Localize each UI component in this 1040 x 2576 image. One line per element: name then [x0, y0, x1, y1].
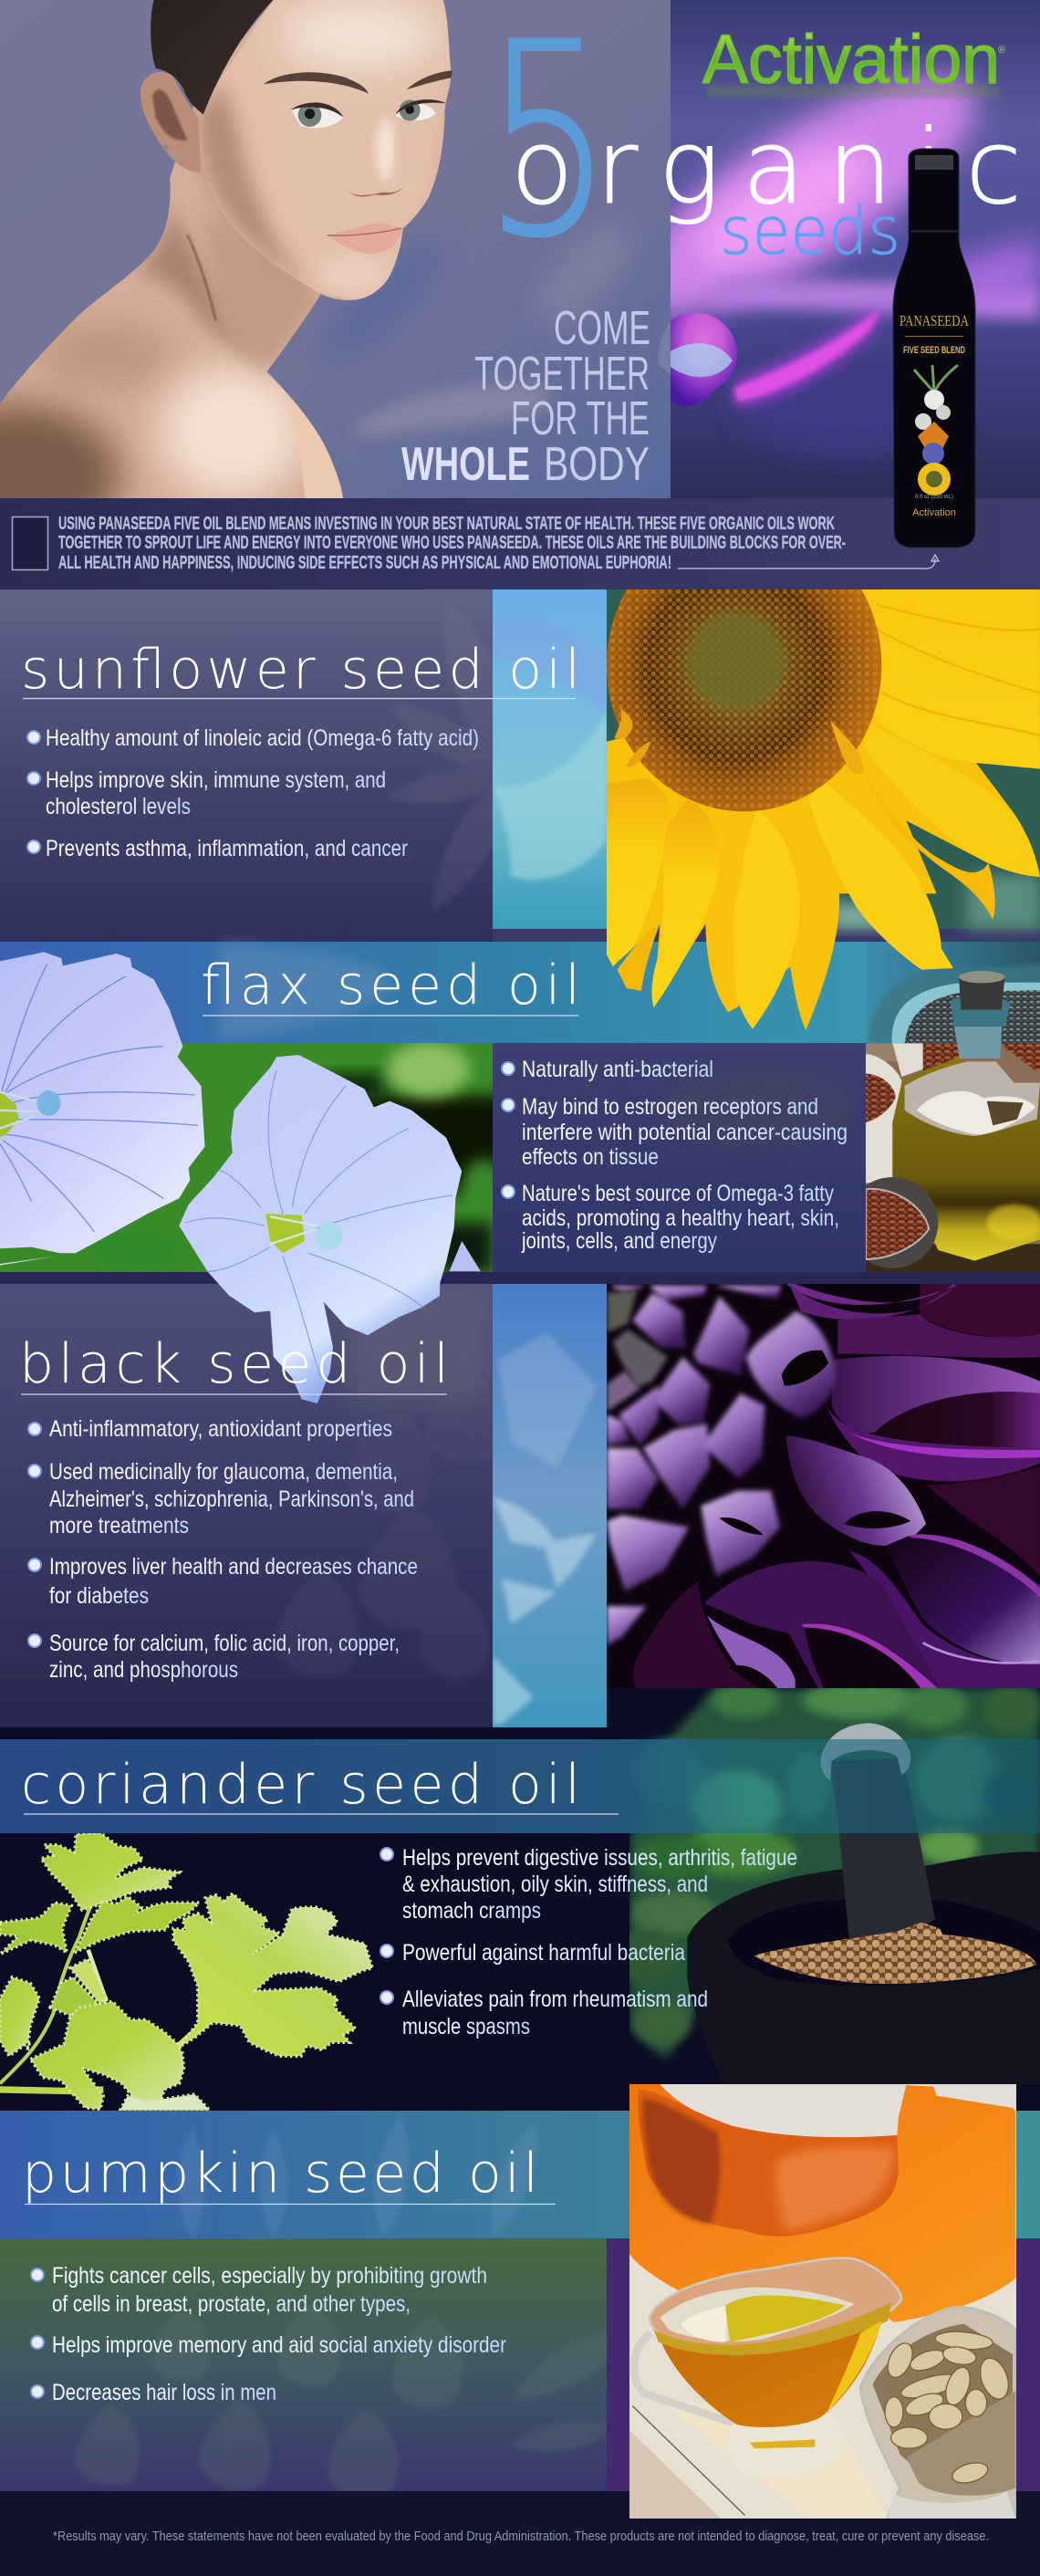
tagline: TOGETHER	[474, 348, 650, 401]
bullets: black seed oil: Used medicinally for glaucoma, dementia,	[49, 1459, 398, 1485]
bullets: black seed oil: zinc, and phosphorous	[49, 1657, 238, 1683]
bullets: sunflower seed oil: cholesterol levels	[46, 794, 191, 819]
bullets: flax seed oil: Nature's best source of Omega-3 fatty	[522, 1181, 834, 1206]
heading: pumpkin seed oil: pumpkin seed oil	[22, 2142, 538, 2206]
tagline: COME	[554, 302, 650, 355]
photo: mortar, pestle and foliage	[629, 1688, 1040, 2062]
bullets: flax seed oil: joints, cells, and energy	[521, 1228, 717, 1254]
glass of pumpkin seeds	[860, 2307, 1015, 2519]
heading: coriander seed oil: coriander seed oil	[21, 1753, 580, 1817]
bullets: pumpkin seed oil: of cells in breast, prostate, and other types,	[52, 2291, 411, 2317]
purple panel right	[607, 2238, 1040, 2491]
bullets: flax seed oil: May bind to estrogen receptors and	[522, 1094, 818, 1120]
bullets: black seed oil: Alzheimer's, schizophrenia, Parkinson's, and	[49, 1486, 414, 1512]
intro text: ALL HEALTH AND HAPPINESS, INDUCING SIDE EFFECTS SUCH AS PHYSICAL AND EMOTIONAL EUPHORIA!	[58, 553, 671, 573]
bullets: black seed oil: Source for calcium, folic acid, iron, copper,	[49, 1631, 400, 1656]
bullets: black seed oil: for diabetes	[49, 1583, 149, 1609]
left eye	[291, 102, 344, 128]
bullets: black seed oil: Improves liver health and decreases chance	[49, 1554, 418, 1580]
bullets: sunflower seed oil: Healthy amount of linoleic acid (Omega-6 fatty acid)	[46, 725, 479, 751]
tagline	[401, 302, 650, 491]
bullets: sunflower seed oil: Helps improve skin, immune system, and	[46, 767, 386, 793]
title word: seeds: seeds	[720, 193, 900, 269]
bullets: pumpkin seed oil	[31, 2263, 506, 2405]
bullets: coriander seed oil: Alleviates pain from rheumatism and	[402, 1987, 708, 2012]
coriander stems	[0, 1907, 192, 2095]
photo: oil bottle and seeds	[866, 942, 1040, 1272]
sunflower seed head	[607, 589, 881, 812]
photo: coriander plant	[0, 1832, 372, 2111]
pumpkin title band	[0, 2111, 1040, 2238]
coriander title band	[0, 1739, 1040, 1833]
tagline: FOR THE	[511, 392, 650, 445]
bullets: flax seed oil	[502, 1057, 848, 1254]
icon: purple water drop	[659, 313, 737, 406]
section: coriander seed oil	[0, 1682, 1040, 2111]
empty outlined box	[13, 516, 47, 569]
blue-teal petal strip	[493, 1284, 607, 1727]
bullets: coriander seed oil	[380, 1845, 797, 2039]
intro band	[0, 498, 1040, 589]
pumpkin slice	[629, 2084, 1015, 2322]
heading: flax seed oil: flax seed oil	[201, 954, 580, 1017]
bottle label text: PANASEEDA	[900, 312, 970, 329]
oil gravy boat	[634, 2258, 901, 2477]
bullets: flax seed oil: acids, promoting a healthy heart, skin,	[522, 1205, 839, 1231]
section: flax seed oil	[0, 940, 1040, 1403]
bullets: pumpkin seed oil: Helps improve memory and aid social anxiety disorder	[52, 2332, 506, 2358]
section: black seed oil panel	[0, 1271, 1040, 1727]
ear	[140, 72, 201, 173]
section: sunflower seed oil panel	[0, 589, 1040, 942]
heading: black seed oil: black seed oil	[19, 1332, 449, 1396]
title word: organic: organic	[511, 109, 1022, 227]
bottle volume: 8 fl oz (250 mL)	[915, 495, 953, 500]
heading: sunflower seed oil: sunflower seed oil	[21, 638, 580, 702]
logo: Activation: ®	[998, 45, 1005, 56]
bullets: flax seed oil: Naturally anti-bacterial	[522, 1057, 713, 1082]
photo: purple dahlia	[607, 1284, 1040, 1692]
panel: header photo of purple drop	[671, 0, 1040, 498]
sunflower petals	[607, 589, 1040, 1030]
blurred coriander foliage	[611, 1682, 1040, 2060]
bottle label subtitle: FIVE SEED BLEND	[903, 345, 965, 356]
photo: green foliage backdrop	[0, 1042, 511, 1272]
bullets: pumpkin seed oil: Fights cancer cells, especially by prohibiting growth	[52, 2263, 487, 2289]
bullets: coriander seed oil: muscle spasms	[402, 2014, 530, 2039]
coriander seeds	[754, 1923, 1037, 1984]
blue petal strip	[493, 589, 607, 929]
photo: pumpkin, oil and seeds	[620, 2081, 1040, 2528]
flax title band	[0, 942, 867, 1043]
flower two	[179, 1055, 481, 1403]
bullets: flax seed oil: interfere with potential cancer-causing	[522, 1120, 848, 1145]
coriander leaves	[0, 1832, 372, 2111]
flax text panel	[493, 1043, 866, 1272]
earrings	[162, 144, 177, 158]
skin and shading	[0, 0, 451, 498]
bullets: black seed oil: more treatments	[49, 1513, 189, 1538]
mortar	[687, 1851, 1040, 2022]
tagline: BODY	[544, 438, 650, 491]
bullets: flax seed oil: effects on tissue	[522, 1144, 659, 1170]
product: Panaseeda bottle	[893, 149, 975, 548]
bottle brand: Activation	[912, 507, 956, 518]
bullets: sunflower seed oil	[27, 725, 479, 861]
bullets: coriander seed oil: & exhaustion, oily skin, stiffness, and	[402, 1872, 708, 1897]
nose shadow	[347, 183, 407, 196]
bullets: pumpkin seed oil: Decreases hair loss in men	[52, 2380, 276, 2405]
bullets: coriander seed oil: stomach cramps	[402, 1898, 541, 1924]
mortar well	[728, 1900, 1040, 1986]
panel: header left with portrait	[0, 0, 671, 549]
bullets: coriander seed oil: Helps prevent digestive issues, arthritis, fatigue	[402, 1845, 797, 1871]
bullets: black seed oil	[28, 1416, 418, 1683]
pumpkin text panel	[0, 2238, 640, 2499]
photo: sunflower	[607, 589, 1040, 1031]
bottle flower emblem	[914, 365, 958, 495]
bullets: coriander seed oil: Powerful against harmful bacteria	[402, 1940, 685, 1966]
section: pumpkin seed oil	[0, 2111, 1040, 2499]
hair	[151, 0, 273, 114]
arrow to bottle	[678, 555, 939, 568]
eyebrows	[264, 72, 369, 94]
inner ear	[152, 89, 187, 141]
flower one	[0, 952, 205, 1266]
bullets: black seed oil: Anti-inflammatory, antioxidant properties	[49, 1416, 392, 1442]
photo: flax flowers	[0, 952, 481, 1403]
lips	[328, 224, 401, 255]
right eye	[396, 99, 446, 120]
bullets: sunflower seed oil: Prevents asthma, inflammation, and cancer	[46, 836, 408, 861]
tagline: WHOLE	[401, 438, 530, 491]
logo: Activation: Activation	[702, 21, 1000, 99]
pestle	[820, 1723, 935, 1946]
portrait: woman	[0, 0, 452, 498]
intro text	[58, 514, 846, 573]
